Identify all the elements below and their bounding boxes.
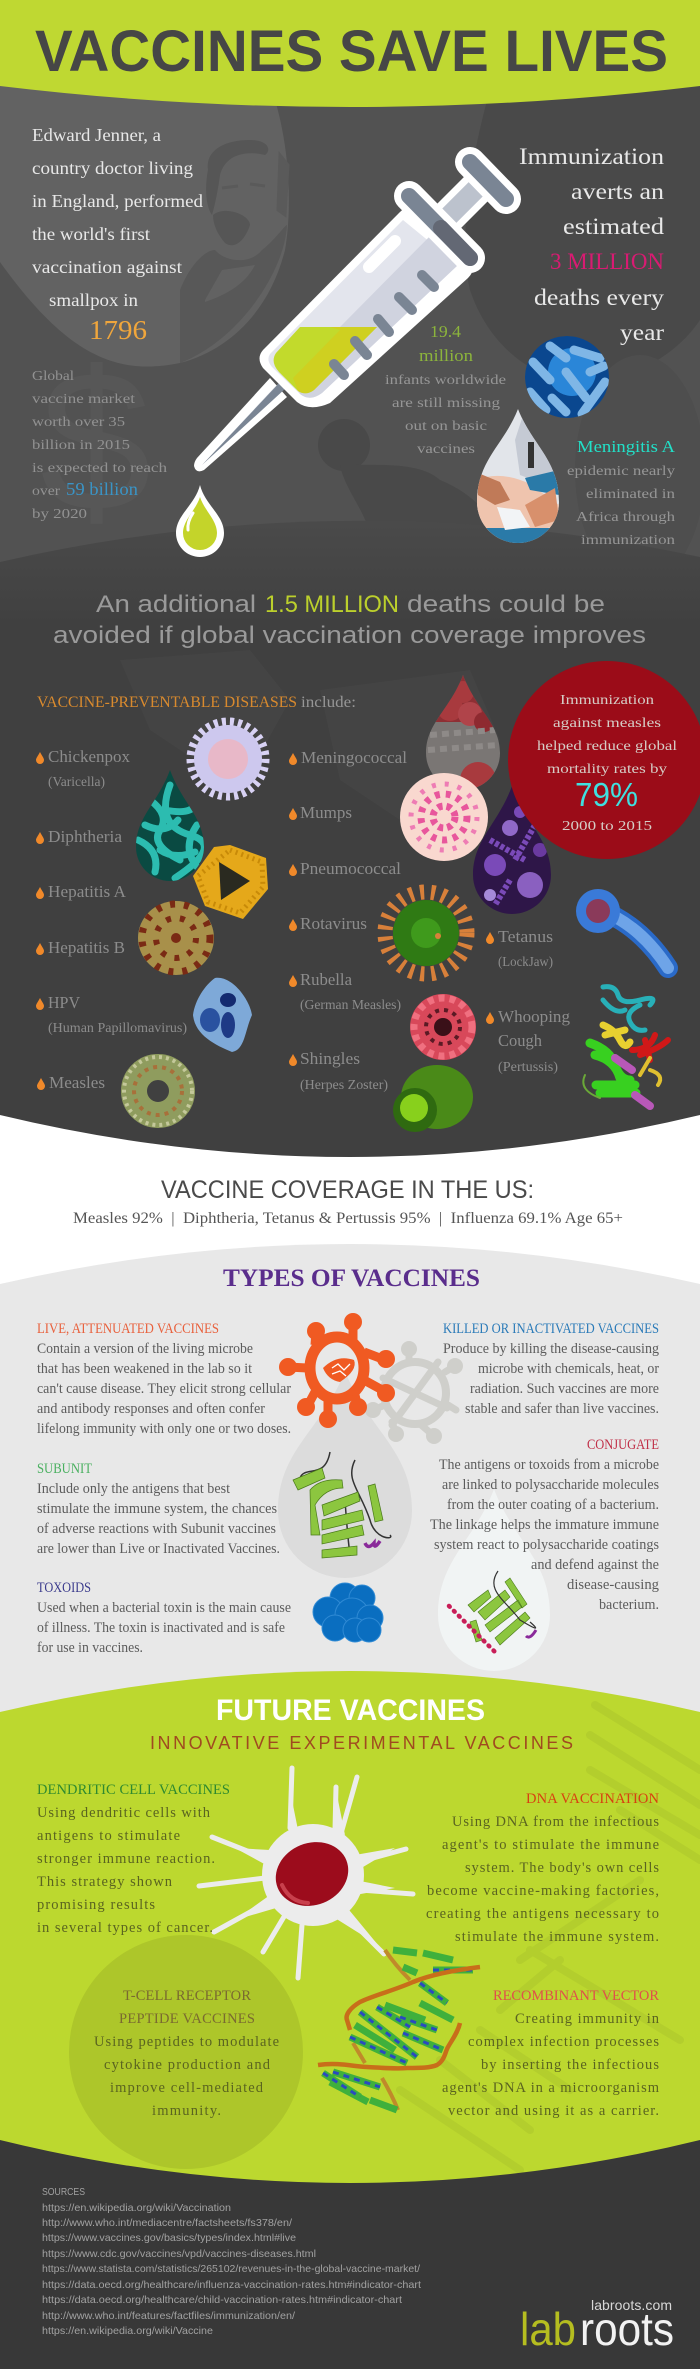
text block: immunization averts 3 million deaths: Immunization (519, 144, 665, 169)
subheading: innovative experimental vaccines: INNOVATIVE EXPERIMENTAL VACCINES (150, 1733, 573, 1753)
text block: 19.4 million infants: out on basic (405, 419, 487, 434)
text block: meningitis A: Meningitis A (577, 437, 676, 456)
logo: labroots: labroots.com (591, 2297, 672, 2313)
text block: Edward Jenner: smallpox in (49, 290, 138, 310)
image: pertussis protein (583, 987, 668, 1106)
text block: toxoids: of illness. The toxin is inactivated and is safe (37, 1620, 285, 1636)
disease list: first column: Hepatitis B (48, 938, 125, 957)
logo: labroots: lab (520, 2303, 576, 2355)
text block: live attenuated vaccines: and antibody responses and often confer (37, 1401, 265, 1417)
disease list: second column: (German Measles) (300, 997, 401, 1012)
text block: live attenuated vaccines: LIVE, ATTENUATED VACCINES (37, 1321, 219, 1337)
heading: vaccine-preventable diseases: VACCINE-PREVENTABLE DISEASES (37, 694, 297, 711)
text block: subunit: SUBUNIT (37, 1461, 92, 1477)
text block: global vaccine market: worth over 35 (32, 415, 125, 430)
text block: 19.4 million infants: million (419, 346, 474, 365)
panel: measles mortality red circle: mortality rates by (547, 762, 667, 777)
panel: dark intro background: $ (40, 330, 151, 553)
text block: killed or inactivated vaccines: radiation. Such vaccines are more (470, 1381, 659, 1397)
image: blue bacteria circle (525, 336, 609, 418)
heading: vaccine coverage in the US: VACCINE COVERAGE IN THE US: (161, 1176, 534, 1204)
panel: types of vaccines (0, 1244, 700, 1740)
text block: immunization averts 3 million deaths: averts an (571, 179, 665, 204)
text block: conjugate: The linkage helps the immature immune (430, 1517, 659, 1533)
text block: DNA vaccination (426, 1791, 660, 1945)
icon: grey inactivated virus (365, 1341, 463, 1444)
text block: global vaccine market: over (32, 484, 60, 499)
panel: t-cell receptor circle (69, 1935, 303, 2169)
text block: t-cell receptor peptide vaccines: cytokine production and (104, 2057, 271, 2073)
text block: sources (42, 2186, 421, 2337)
disease list: first column: Measles (49, 1073, 105, 1092)
text block: global vaccine market: billion in 2015 (32, 438, 130, 453)
panel: measles mortality red circle (508, 661, 700, 859)
heading: types of vaccines: TYPES OF VACCINES (223, 1265, 480, 1292)
heading: vaccine-preventable diseases: include: (301, 694, 356, 711)
text block: t-cell receptor peptide vaccines: immunity. (152, 2103, 221, 2119)
text block: sources: https://en.wikipedia.org/wiki/Vaccine (42, 2325, 213, 2337)
panel: white coverage area (0, 1115, 700, 1720)
disease list: third column: Whooping (498, 1007, 570, 1026)
disease list: second column: Rotavirus (300, 914, 367, 933)
panel: measles mortality red circle: Immunization (560, 693, 654, 708)
image: diphtheria teal drop (136, 770, 204, 881)
text block: 19.4 million infants: are still missing (392, 396, 500, 411)
image: chickenpox virus (191, 722, 265, 796)
image: measles ring virus (124, 1057, 192, 1125)
text block: killed or inactivated vaccines: KILLED OR INACTIVATED VACCINES (443, 1321, 659, 1337)
text block: Edward Jenner: vaccination against (32, 257, 182, 277)
panel: future vaccines (0, 1671, 700, 2200)
panel: measles mortality red circle: 79% (575, 776, 638, 813)
text block: sources: SOURCES (42, 2186, 85, 2198)
text block: killed or inactivated vaccines: Produce by killing the disease-causing (443, 1341, 659, 1357)
text block: DNA vaccination: Using DNA from the infectious (452, 1814, 659, 1830)
panel: measles mortality red circle: against measles (553, 716, 661, 731)
text block: recombinant vector: by inserting the infectious (481, 2057, 659, 2073)
text block: recombinant vector: RECOMBINANT VECTOR (493, 1988, 659, 2004)
disease list: second column: Shingles (300, 1049, 360, 1068)
text block: sources: http://www.who.int/features/factfiles/immunization/en/ (42, 2310, 295, 2322)
text block: conjugate: system react to polysaccharide coatings (434, 1537, 659, 1553)
text block: t-cell receptor peptide vaccines: T-CELL RECEPTOR (123, 1988, 251, 2004)
text block: live attenuated vaccines: Contain a version of the living microbe (37, 1341, 253, 1357)
image: shingles green cell (393, 1065, 473, 1132)
panel: measles mortality red circle: helped reduce global (537, 739, 677, 754)
icon: green vaccine drop (176, 485, 224, 557)
panel: dark intro background (0, 0, 700, 1160)
text block: t-cell receptor peptide vaccines: Using peptides to modulate (94, 2034, 279, 2050)
text block: global vaccine market (32, 369, 167, 522)
text block: dendritic cell vaccines: DENDRITIC CELL VACCINES (37, 1782, 230, 1798)
text block: toxoids (37, 1580, 291, 1656)
disease list: second column: Meningococcal (301, 748, 407, 767)
heading: additional 1.5 million deaths: avoided if global vaccination coverage improves (53, 622, 646, 649)
text block: global vaccine market: by 2020 (32, 507, 87, 522)
disease list: third column: Cough (498, 1031, 543, 1050)
text block: live attenuated vaccines: lifelong immunity with only one or two doses. (37, 1421, 291, 1437)
text block: conjugate: are linked to polysaccharide molecules (442, 1477, 659, 1493)
text block: meningitis A: Africa through (576, 510, 675, 525)
disease list: third column: (LockJaw) (498, 954, 553, 969)
text block: sources: https://en.wikipedia.org/wiki/Vaccination (42, 2202, 231, 2214)
logo: labroots: roots (580, 2303, 674, 2355)
text block: conjugate: disease-causing (567, 1577, 659, 1593)
text block: killed or inactivated vaccines: stable and safer than live vaccines. (465, 1401, 659, 1417)
text block: global vaccine market: is expected to reach (32, 461, 167, 476)
text block: subunit: Include only the antigens that best (37, 1481, 230, 1497)
disease list: first column: Chickenpox (48, 747, 131, 766)
text block: sources: https://data.oecd.org/healthcare/child-vaccination-rates.htm#indicator-chart (42, 2294, 402, 2306)
text block: Edward Jenner: 1796 (89, 315, 147, 345)
image: HPV blue cell (193, 978, 252, 1052)
disease list: first column: (Human Papillomavirus) (48, 1020, 187, 1035)
text block: Edward Jenner (32, 125, 203, 345)
heading: additional 1.5 million deaths: 1.5 MILLION (265, 591, 399, 618)
image: mumps pink circle (400, 773, 488, 861)
disease list: third column: Tetanus (498, 927, 553, 946)
image: tetanus bacillus (576, 889, 668, 968)
text block: 19.4 million infants (385, 322, 506, 457)
text block: meningitis A (567, 437, 676, 548)
text block: Edward Jenner: in England, performed (32, 191, 203, 211)
text block: DNA vaccination: agent's to stimulate the immune (442, 1837, 659, 1853)
text block: subunit (37, 1461, 280, 1557)
image: hepatitis A hexagon (193, 845, 268, 919)
text block: subunit: stimulate the immune system, the chances (37, 1501, 277, 1517)
title: VACCINES SAVE LIVES (35, 19, 668, 84)
text block: 19.4 million infants: infants worldwide (385, 373, 506, 388)
disease list: second column: Pneumococcal (300, 859, 401, 878)
text block: recombinant vector (442, 1988, 660, 2119)
text block: DNA vaccination: DNA VACCINATION (526, 1791, 660, 1807)
text block: toxoids: for use in vaccines. (37, 1640, 143, 1656)
text block: toxoids: Used when a bacterial toxin is the main cause (37, 1600, 291, 1616)
text block: dendritic cell vaccines (37, 1782, 230, 1936)
text block: recombinant vector: vector and using it as a carrier. (448, 2103, 659, 2119)
text block: killed or inactivated vaccines (443, 1321, 659, 1417)
image: infant vaccination drop (477, 409, 559, 543)
text block: conjugate: The antigens or toxoids from a microbe (439, 1457, 659, 1473)
disease list: second column: Rubella (300, 970, 353, 989)
icon: subunit protein (293, 1452, 391, 1558)
panel: green title banner (0, 0, 700, 107)
text block: 19.4 million infants: 19.4 (430, 322, 462, 341)
text block: live attenuated vaccines: can't cause disease. They elicit strong cellular (37, 1381, 291, 1397)
text block: t-cell receptor peptide vaccines (94, 1988, 279, 2119)
text block: t-cell receptor peptide vaccines: PEPTIDE VACCINES (119, 2011, 255, 2027)
text block: immunization averts 3 million deaths: year (620, 320, 664, 345)
text block: subunit: are lower than Live or Inactivated Vaccines. (37, 1541, 280, 1557)
text block: Edward Jenner: the world's first (32, 224, 150, 244)
text block: meningitis A: epidemic nearly (567, 464, 675, 479)
panel: measles mortality red circle: 2000 to 2015 (562, 819, 652, 834)
icon: syringe (194, 162, 506, 471)
disease list: second column (289, 748, 407, 1092)
text block: dendritic cell vaccines: This strategy shown (37, 1874, 173, 1890)
image: pneumococcal purple drop (473, 786, 551, 914)
disease list: first column (36, 747, 187, 1092)
disease list: first column: Diphtheria (48, 827, 123, 846)
text block: recombinant vector: complex infection processes (468, 2034, 659, 2050)
icon: toxoid blue cluster (313, 1583, 383, 1642)
text block: conjugate: from the outer coating of a bacterium. (447, 1497, 659, 1513)
text block: t-cell receptor peptide vaccines: improve cell-mediated (110, 2080, 264, 2096)
text block: conjugate: bacterium. (599, 1597, 659, 1613)
text block: dendritic cell vaccines: antigens to stimulate (37, 1828, 180, 1844)
text block: global vaccine market: Global (32, 369, 74, 384)
text block: DNA vaccination: become vaccine-making factories, (427, 1883, 659, 1899)
text block: dendritic cell vaccines: Using dendritic cells with (37, 1805, 211, 1821)
text block: sources: http://www.who.int/mediacentre/factsheets/fs378/en/ (42, 2217, 292, 2229)
image: rotavirus green spiky (385, 892, 467, 974)
icon: dendritic cell (199, 1768, 413, 1978)
text block: sources: https://www.cdc.gov/vaccines/vpd/vaccines-diseases.html (42, 2248, 316, 2260)
heading: future vaccines: FUTURE VACCINES (216, 1694, 485, 1727)
text block: global vaccine market: 59 billion (66, 479, 138, 499)
text block: immunization averts 3 million deaths: 3 MILLION (550, 249, 664, 274)
text: coverage figures: Measles 92% | Diphtheria, Tetanus & Pertussis 95% | Influenza 69.1% Age 65+ (73, 1210, 623, 1227)
text block: DNA vaccination: stimulate the immune system. (455, 1929, 659, 1945)
heading: additional 1.5 million deaths (53, 591, 646, 649)
image: meningococcal drop (426, 675, 500, 798)
panel: footer (0, 2140, 700, 2369)
text block: recombinant vector: Creating immunity in (515, 2011, 660, 2027)
disease list: first column: HPV (48, 993, 80, 1012)
text block: dendritic cell vaccines: in several types of cancer. (37, 1920, 213, 1936)
text block: conjugate (430, 1437, 659, 1613)
text block: 19.4 million infants: vaccines (417, 442, 475, 457)
logo: labroots (520, 2297, 674, 2355)
disease list: first column: Hepatitis A (48, 882, 126, 901)
text block: Edward Jenner: country doctor living (32, 158, 193, 178)
text block: live attenuated vaccines (37, 1321, 291, 1437)
text block: DNA vaccination: creating the antigens necessary to (426, 1906, 659, 1922)
disease list: second column: Mumps (300, 803, 352, 822)
disease list: first column: (Varicella) (48, 774, 105, 789)
icon: DNA helix (318, 1950, 480, 2110)
text block: subunit: of adverse reactions with Subunit vaccines (37, 1521, 276, 1537)
text block: immunization averts 3 million deaths: deaths every (534, 285, 665, 310)
disease list: second column: (Herpes Zoster) (300, 1077, 388, 1092)
icon: orange live virus (279, 1313, 395, 1428)
text block: killed or inactivated vaccines: microbe with chemicals, heat, or (478, 1361, 659, 1377)
disease list: third column (486, 927, 570, 1074)
text block: conjugate: CONJUGATE (587, 1437, 659, 1453)
text block: sources: https://www.vaccines.gov/basics/types/index.html#live (42, 2232, 296, 2244)
icon: white drop with conjugate protein (438, 1489, 550, 1671)
image: hepatitis B virus (138, 901, 214, 975)
icon: grey drop (278, 1371, 412, 1578)
text block: immunization averts 3 million deaths: estimated (563, 214, 665, 239)
disease list: third column: (Pertussis) (498, 1059, 558, 1074)
decoration: faint DNA strands (400, 1705, 700, 2170)
text block: meningitis A: eliminated in (586, 487, 675, 502)
text block: conjugate: and defend against the (531, 1557, 659, 1573)
text block: recombinant vector: agent's DNA in a microorganism (442, 2080, 660, 2096)
heading: additional 1.5 million deaths: An additional (96, 591, 256, 618)
text block: toxoids: TOXOIDS (37, 1580, 91, 1596)
text block: live attenuated vaccines: that has been weakened in the lab so it (37, 1361, 252, 1377)
text block: dendritic cell vaccines: promising results (37, 1897, 155, 1913)
text block: dendritic cell vaccines: stronger immune reaction. (37, 1851, 215, 1867)
text block: immunization averts 3 million deaths (519, 144, 665, 345)
text block: meningitis A: immunization (581, 533, 675, 548)
text block: global vaccine market: vaccine market (32, 392, 135, 407)
text block: sources: https://www.statista.com/statistics/265102/revenues-in-the-global-vaccine-market/ (42, 2263, 420, 2275)
image: rubella red virus (410, 994, 476, 1060)
text block: Edward Jenner: Edward Jenner, a (32, 125, 161, 145)
heading: additional 1.5 million deaths: deaths could be (407, 591, 605, 618)
text block: sources: https://data.oecd.org/healthcare/influenza-vaccination-rates.htm#indicator-chart (42, 2279, 421, 2291)
text block: DNA vaccination: system. The body's own cells (465, 1860, 659, 1876)
